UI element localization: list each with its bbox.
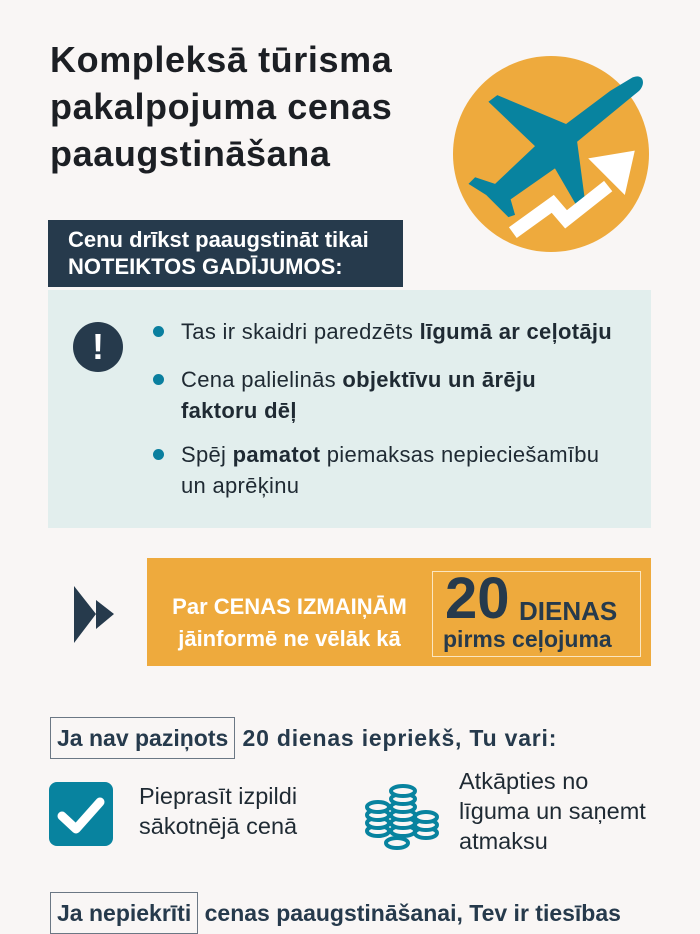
heading: if not notified: Ja nav paziņots [57, 725, 228, 751]
heading: if not notified [50, 717, 557, 759]
heading: if disagree: Ja nepiekrīti [57, 900, 191, 926]
bullet 2: Cena palielinās objektīvu un ārēju [181, 367, 536, 392]
bullet 2: faktoru dēļ [181, 398, 297, 423]
callout: 20 days [147, 558, 651, 666]
inner box: 20 [445, 566, 510, 631]
text: withdraw [459, 768, 646, 854]
header box: NOTEIKTOS GADĪJUMOS: [68, 254, 343, 279]
callout: 20 days: jāinformē ne vēlāk kā [178, 626, 401, 651]
text: withdraw: atmaksu [459, 828, 548, 854]
bullet 2 [153, 367, 536, 423]
icon: exclamation [73, 322, 123, 372]
icon: checkbox [49, 782, 113, 846]
heading: if disagree: cenas paaugstināšanai, Tev ir tiesības [205, 900, 621, 926]
panel: conditions [48, 290, 651, 528]
icon: double arrow [74, 586, 114, 643]
header box [48, 220, 403, 287]
icon: plane with rising arrow [453, 56, 649, 252]
bullet 3: un aprēķinu [181, 473, 299, 498]
inner box: pirms ceļojuma [443, 626, 612, 652]
inner box: DIENAS [519, 596, 617, 626]
title: paaugstināšana [50, 133, 330, 174]
title: Kompleksā tūrisma [50, 39, 392, 80]
bullet 3 [153, 442, 599, 498]
text: demand original price [139, 783, 298, 839]
callout: 20 days: Par CENAS IZMAIŅĀM [172, 594, 407, 619]
bullet 3: Spēj pamatot piemaksas nepieciešamību [181, 442, 599, 467]
inner box [432, 571, 641, 657]
bullet 1: Tas ir skaidri paredzēts līgumā ar ceļotāju [181, 319, 612, 344]
heading: if disagree [50, 892, 621, 934]
text: withdraw: līguma un saņemt [459, 798, 646, 824]
text: demand original price: sākotnējā cenā [139, 813, 297, 839]
heading: if not notified: 20 dienas iepriekš, Tu vari: [242, 725, 557, 751]
title: pakalpojuma cenas [50, 86, 392, 127]
text: withdraw: Atkāpties no [459, 768, 588, 794]
header box: Cenu drīkst paaugstināt tikai [68, 227, 369, 252]
text: demand original price: Pieprasīt izpildi [139, 783, 297, 809]
icon: exclamation: ! [92, 326, 104, 367]
title [50, 39, 392, 174]
icon: coins [365, 784, 439, 850]
